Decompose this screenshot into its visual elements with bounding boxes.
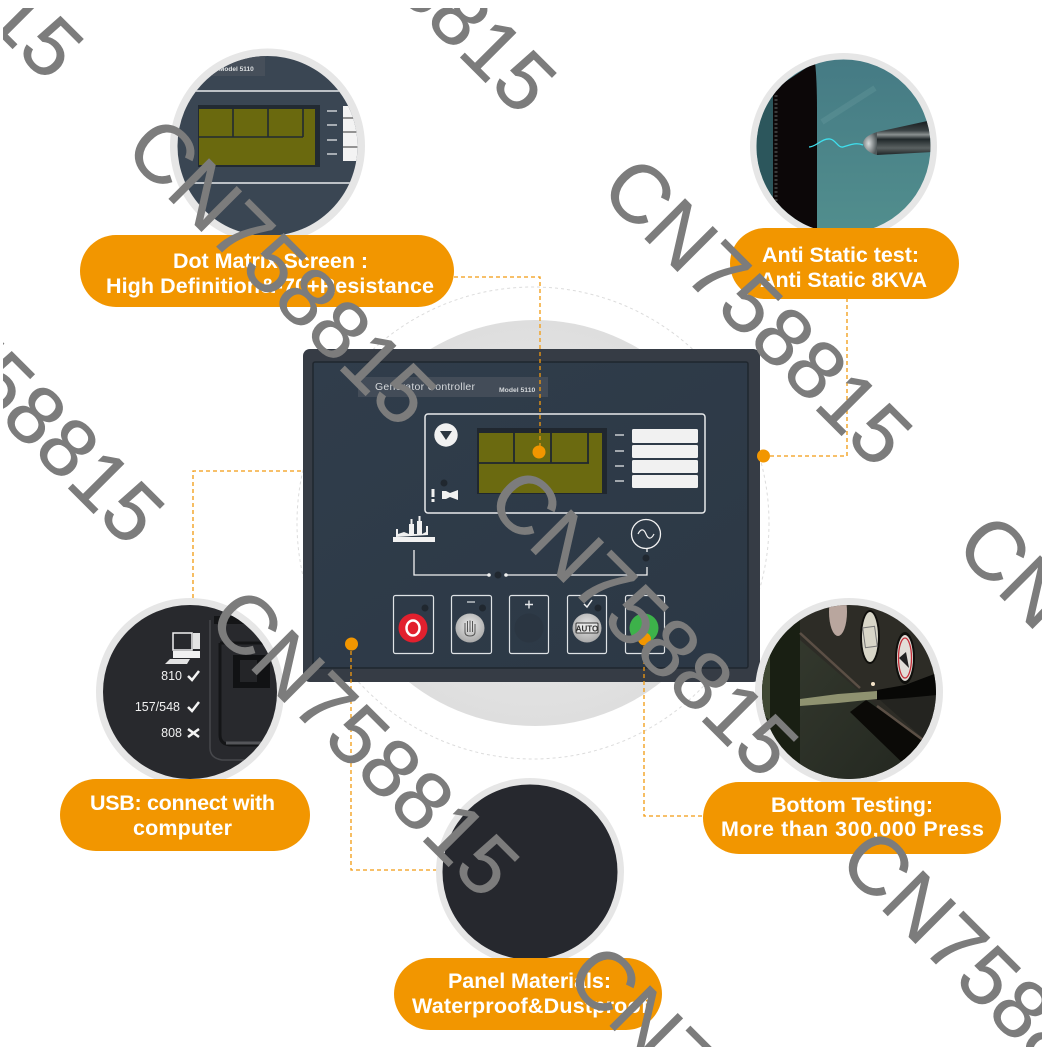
controller panel — [303, 349, 760, 682]
transfer line — [414, 550, 647, 578]
leader: anti static — [763, 299, 847, 456]
leader: panel materials — [351, 644, 437, 870]
pill: panel materials — [394, 958, 662, 1030]
inset: button testing — [755, 588, 945, 790]
model strip — [358, 377, 548, 397]
pill: button testing: More than 300,000 Press — [721, 817, 984, 841]
inset: usb port — [96, 598, 290, 786]
display frame — [425, 414, 705, 513]
inset: usb port: 808 — [161, 726, 182, 740]
pill: anti static test: Anti Static test: — [762, 243, 919, 267]
pill: button testing: Bottom Testing: — [771, 793, 933, 817]
pill: dot matrix screen: Dot Matrix Screen : — [173, 249, 368, 273]
inset: usb port: 157/548 — [135, 700, 180, 714]
leader: usb — [193, 471, 301, 598]
pill: usb: computer — [133, 816, 233, 840]
pill: panel materials: Waterproof&Dustproof — [412, 994, 649, 1018]
auto button: AUTO — [576, 624, 598, 634]
pill: button testing — [703, 782, 1001, 854]
inset: dot matrix screen — [170, 48, 370, 244]
pill: dot matrix screen: High Definition&-70+Resistance — [106, 274, 434, 298]
marker dots — [345, 446, 770, 650]
inset: dot matrix screen: Model 5110 — [219, 66, 254, 73]
model strip: Model 5110 — [499, 387, 535, 394]
icon: generator sine — [632, 520, 660, 562]
watermarks: CN758815 — [585, 140, 929, 484]
icon: load factory — [393, 516, 435, 542]
inset: usb port: 810 — [161, 669, 182, 683]
pill: usb: USB: connect with — [90, 791, 275, 815]
pill: anti static test — [730, 228, 959, 299]
plus button — [510, 596, 548, 654]
leader: screen — [454, 277, 540, 452]
pill: anti static test: Anti Static 8KVA — [760, 268, 927, 292]
pill: usb — [60, 779, 310, 851]
background circle behind controller — [297, 287, 769, 759]
manual button — [452, 596, 492, 654]
icon: computer — [165, 633, 200, 664]
model strip: Generator Controller — [375, 381, 476, 393]
leader: button testing — [644, 639, 703, 816]
start button — [626, 596, 664, 654]
watermarks: CN758815 — [471, 451, 815, 795]
watermarks: CN758815 — [192, 571, 536, 915]
pill: dot matrix screen — [80, 235, 454, 307]
inset: panel materials — [436, 778, 624, 966]
stop button — [394, 596, 434, 654]
auto button — [568, 596, 606, 654]
inset: anti static test — [750, 53, 940, 240]
watermarks: CN758815 — [109, 100, 453, 444]
pill: panel materials: Panel Materials: — [448, 969, 611, 993]
